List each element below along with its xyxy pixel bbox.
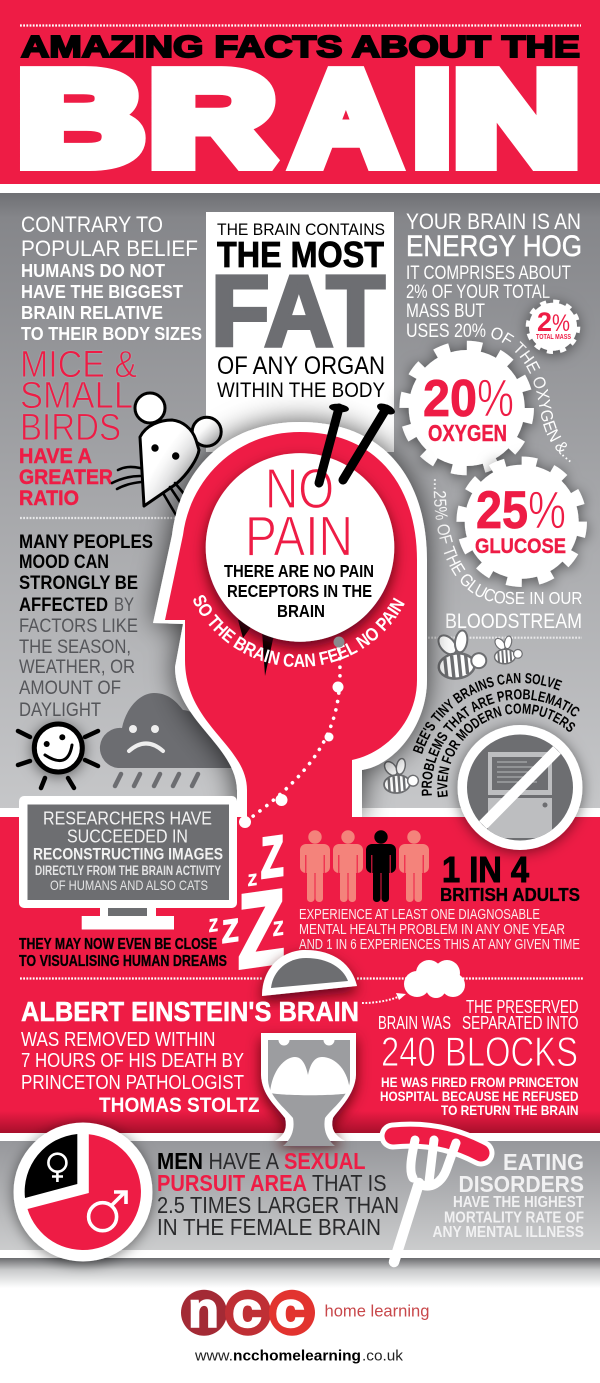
text: website: ncchomelearning: [233, 1348, 361, 1364]
icon: gear 2 percent: 2: [537, 307, 552, 337]
icon: mouse: [112, 393, 221, 515]
text block: no pain: THERE ARE NO PAIN: [224, 561, 374, 581]
band: white under grey panel: [0, 808, 600, 817]
icon: sleeping z letters: Z: [209, 915, 218, 936]
text block: men sexual pursuit area: IN THE FEMALE BRAIN: [157, 1214, 381, 1240]
panel: energy hog: YOUR BRAIN IS AN: [406, 209, 581, 234]
panel: monitor researchers: [19, 796, 237, 930]
icon: nail shafts behind circle: [238, 620, 275, 676]
text block: mood: [19, 532, 153, 721]
icon: gear 20 percent oxygen: 20: [423, 370, 477, 428]
text: website: .co.uk: [362, 1348, 404, 1364]
text block: no pain: RECEPTORS IN THE: [227, 581, 372, 601]
icon: head outline: [153, 422, 427, 817]
panel: contrary to popular belief: POPULAR BELIEF: [21, 236, 198, 261]
panel: contrary to popular belief: CONTRARY TO: [21, 212, 163, 237]
text block: mice and small birds: [19, 344, 137, 510]
icon: einstein head: [261, 1033, 356, 1146]
icon: four people: [300, 830, 429, 902]
icon: nails: [319, 401, 396, 483]
text block: human dreams: TO VISUALISING HUMAN DREAMS: [19, 953, 227, 970]
panel: the most fat: THE MOST: [217, 234, 384, 275]
text block: bees curved: PROBLEMS THAT ARE PROBLEMATIC: [422, 689, 580, 796]
logo: ncc home learning: c: [232, 1282, 262, 1338]
icon: bottom bee: [382, 757, 419, 794]
panel: energy hog: USES 20%: [406, 321, 486, 342]
panel: monitor researchers: RECONSTRUCTING IMAGES: [33, 844, 223, 864]
title: brain: R: [149, 44, 276, 192]
panel: the most fat: OF ANY ORGAN: [217, 352, 385, 380]
text block: mood: MOOD CAN: [19, 552, 109, 573]
icon: small bee: [493, 634, 523, 665]
icon: male symbol: [89, 1192, 126, 1231]
text block: eating disorders: DISORDERS: [458, 1171, 584, 1197]
panel: energy hog: MASS BUT: [406, 301, 485, 322]
text block: mood: THE SEASON,: [19, 637, 131, 658]
icon: white circle no pain: [206, 453, 394, 642]
text block: 1 in 4 british adults: EXPERIENCE AT LEAST ONE DIAGNOSABLE: [299, 907, 540, 923]
title: brain: B: [18, 44, 144, 192]
text block: men sexual pursuit area: SEXUAL: [284, 1148, 366, 1174]
text block: mood: FACTORS LIKE: [19, 616, 138, 637]
text block: mice and small birds: HAVE A: [19, 445, 92, 468]
text block: 1 in 4 british adults: 1 IN 4: [442, 849, 529, 890]
panel: monitor researchers: RESEARCHERS HAVE: [43, 808, 212, 828]
text block: mice and small birds: SMALL: [20, 375, 133, 417]
logo: ncc home learning: c: [275, 1282, 305, 1338]
text block: mood: DAYLIGHT: [19, 700, 101, 721]
text block: eating disorders: [432, 1149, 584, 1241]
icon: sleeping z letters: Z: [273, 916, 283, 940]
panel: red lower section: [0, 817, 600, 1133]
divider dots left: [20, 517, 176, 519]
panel: monitor researchers: OF HUMANS AND ALSO CATS: [50, 877, 208, 893]
panel: contrary to popular belief: HAVE THE BIGGEST: [21, 281, 184, 302]
text: website: www.: [194, 1348, 233, 1364]
icon: sleeping z letters: Z: [261, 824, 284, 891]
text block: albert einstein: THOMAS STOLTZ: [99, 1094, 260, 1117]
panel: monitor researchers: DIRECTLY FROM THE BRAIN ACTIVITY: [35, 863, 221, 878]
panel: the most fat: THE BRAIN CONTAINS: [217, 220, 385, 239]
text block: albert einstein: WAS REMOVED WITHIN: [21, 1029, 216, 1051]
text block: glucose curved: ...25% OF THE GLUCOSE IN OUR: [434, 479, 582, 604]
text block: men sexual pursuit area: MEN: [157, 1148, 203, 1174]
panel: the most fat: FAT: [211, 256, 385, 368]
icon: sad cloud: [100, 693, 235, 786]
icon: large bee: [434, 627, 488, 680]
icon: gear 25 percent glucose: GLUCOSE: [475, 534, 566, 558]
text block: mice and small birds: GREATER: [19, 466, 113, 489]
panel: energy hog: [406, 209, 582, 462]
logo: ncc home learning: [181, 1282, 430, 1338]
title: amazing facts about the: AMAZING FACTS ABOUT THE: [21, 29, 580, 64]
panel: contrary to popular belief: BRAIN RELATIVE: [21, 302, 163, 323]
icon: gear 20 percent oxygen: OXYGEN: [428, 420, 507, 446]
icon: thought cloud: [404, 960, 465, 998]
icon: gear 25 percent glucose: [462, 462, 582, 582]
text block: bees curved: EVEN FOR MODERN COMPUTERS: [437, 703, 576, 798]
icon: gear 25 percent glucose: 25: [476, 481, 528, 540]
text block: mood: MANY PEOPLES: [19, 532, 153, 553]
text block: no pain: [224, 457, 374, 621]
text block: human dreams: [19, 936, 227, 970]
panel: contrary to popular belief: HUMANS DO NOT: [21, 260, 166, 281]
text block: albert einstein: 7 HOURS OF HIS DEATH BY: [21, 1050, 244, 1072]
panel: contrary to popular belief: [21, 212, 202, 344]
text block: men sexual pursuit area: PURSUIT AREA: [157, 1170, 307, 1196]
icon: head red fill: [165, 432, 417, 840]
text block: 1 in 4 british adults: BRITISH ADULTS: [440, 884, 580, 905]
text block: no pain: BRAIN: [277, 601, 325, 621]
text block: mood: AMOUNT OF: [19, 678, 121, 699]
text block: mice and small birds: BIRDS: [20, 407, 121, 449]
panel: bottom grey: [0, 1141, 600, 1288]
text block: human dreams: THEY MAY NOW EVEN BE CLOSE: [19, 936, 217, 953]
icon: sun: [18, 724, 98, 788]
text block: men sexual pursuit area: [157, 1148, 399, 1240]
title: brain: A: [293, 44, 399, 192]
icon: gear 20 percent oxygen: [405, 346, 529, 470]
panel: contrary to popular belief: TO THEIR BODY SIZES: [21, 323, 202, 344]
panel: energy hog: OF THE OXYGEN &...: [491, 328, 571, 462]
panel: header: [0, 0, 600, 192]
text block: mood: STRONGLY BE: [19, 573, 138, 594]
text block: mood: BY: [114, 595, 134, 616]
panel: energy hog: 2% OF YOUR TOTAL: [406, 282, 550, 303]
text block: 240 blocks: [378, 997, 578, 1118]
icon: sleeping z letters: [209, 824, 284, 991]
arrow: dotted to cloud: [362, 993, 406, 1003]
icon: sleeping z letters: Z: [222, 913, 239, 951]
icon: gear 2 percent: [528, 302, 578, 352]
icon: gear 20 percent oxygen: %: [477, 369, 514, 428]
text block: men sexual pursuit area: HAVE A: [208, 1148, 280, 1174]
panel: upper grey background: [0, 193, 600, 810]
text block: albert einstein: PRINCETON PATHOLOGIST: [21, 1072, 244, 1094]
icon: sleeping z letters: Z: [238, 868, 284, 991]
text: website: [194, 1348, 404, 1364]
icon: einstein skull cap: [262, 950, 357, 996]
title: brain: N: [453, 44, 580, 192]
text block: albert einstein: [21, 996, 359, 1117]
icon: female symbol: [48, 1154, 66, 1182]
text block: no pain: NO: [265, 457, 334, 521]
divider dots lower: [20, 977, 583, 980]
panel: the most fat: [206, 212, 394, 452]
panel: the most fat: WITHIN THE BODY: [217, 379, 385, 402]
chart: sexual pursuit pie: [14, 1122, 152, 1262]
icon: gear 2 percent: %: [552, 310, 570, 337]
text block: albert einstein: ALBERT EINSTEIN'S BRAIN: [21, 996, 359, 1027]
panel: monitor researchers: SUCCEEDED IN: [67, 826, 188, 846]
dotted path from brain to monitor: [239, 636, 344, 828]
icon: gear 2 percent: TOTAL MASS: [536, 332, 571, 341]
text block: 1 in 4 british adults: [299, 849, 580, 953]
text block: 240 blocks: BRAIN WAS: [378, 1013, 451, 1033]
text block: mood: AFFECTED: [19, 595, 108, 616]
logo: ncc home learning: n: [188, 1282, 219, 1338]
text block: mice and small birds: MICE &: [20, 344, 137, 386]
text block: mood: WEATHER, OR: [19, 657, 135, 678]
text block: men sexual pursuit area: 2.5 TIMES LARGER THAN: [157, 1192, 399, 1218]
text: so the brain can feel no pain: SO THE BRAIN CAN FEEL NO PAIN: [193, 595, 405, 667]
text block: mice and small birds: RATIO: [19, 487, 79, 510]
logo: ncc home learning: home learning: [324, 1302, 430, 1320]
title: brain: I: [413, 44, 451, 192]
text block: men sexual pursuit area: THAT IS: [312, 1170, 386, 1196]
text block: 240 blocks: TO RETURN THE BRAIN: [441, 1102, 578, 1118]
text block: no pain: PAIN: [245, 504, 353, 568]
icon: gear 25 percent glucose: %: [528, 481, 566, 540]
text block: bees curved: BEE'S TINY BRAINS CAN SOLVE: [412, 673, 562, 754]
icon: sleeping z letters: Z: [248, 871, 257, 890]
text block: eating disorders: EATING: [503, 1149, 584, 1175]
divider dots right: [428, 637, 582, 639]
band: white above bottom panel: [0, 1133, 600, 1141]
icon: fork and sausage: [393, 1135, 481, 1262]
panel: no computers sign: [458, 725, 582, 850]
